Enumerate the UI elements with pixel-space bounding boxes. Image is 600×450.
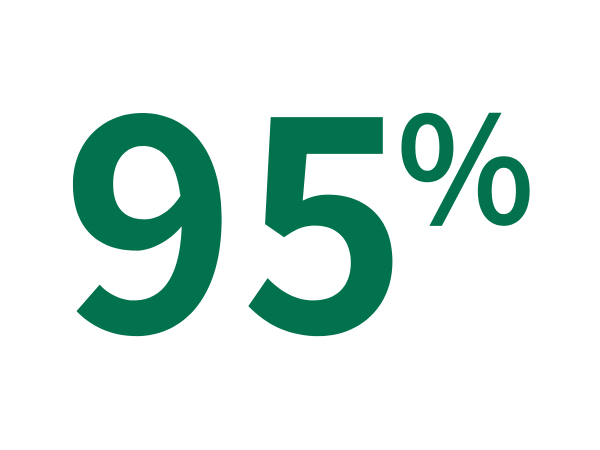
percent sign: % xyxy=(397,55,534,266)
number: 95 xyxy=(61,0,408,418)
